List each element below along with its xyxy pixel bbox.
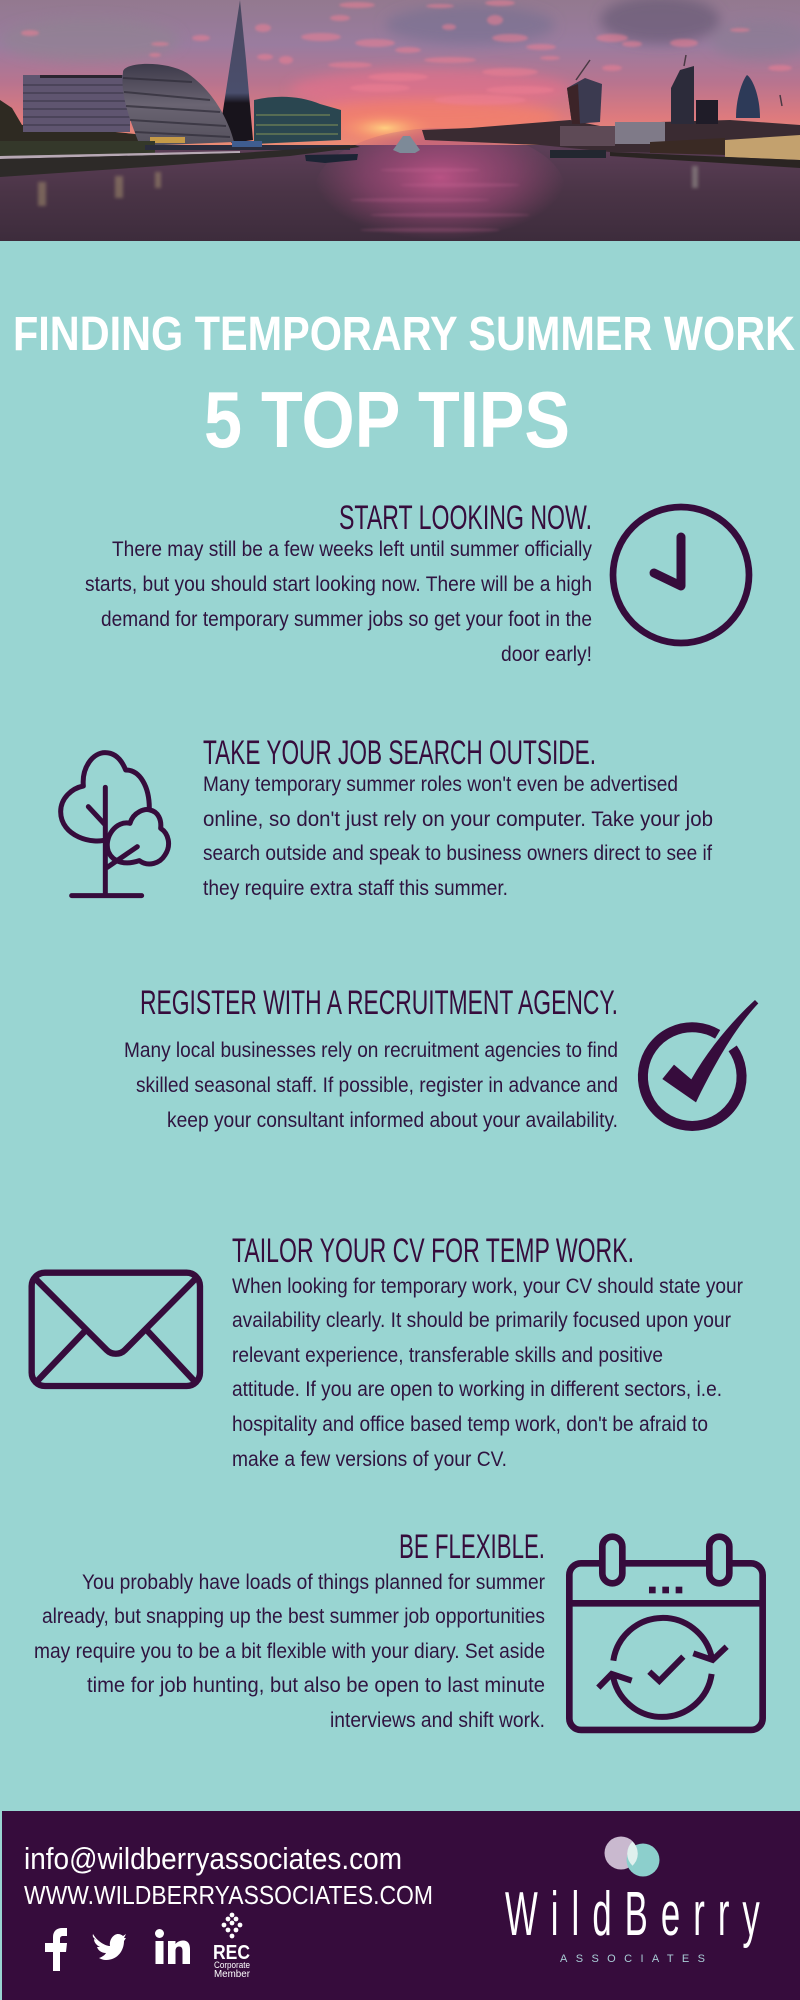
- tip 1 body: starts, but you should start looking now. There will be a high: [85, 572, 592, 596]
- icon: twitter: [93, 1934, 126, 1960]
- left office block: [23, 75, 130, 132]
- tip 4 body: When looking for temporary work, your CV should state your: [232, 1274, 743, 1298]
- tip 5 heading: BE FLEXIBLE.: [399, 1528, 545, 1566]
- tip 5 body: interviews and shift work.: [330, 1708, 545, 1732]
- tip 1: start looking now: [85, 499, 749, 666]
- icon: facebook: [45, 1928, 67, 1971]
- icon: clock: [613, 507, 749, 643]
- City Hall: [122, 64, 234, 146]
- title: [13, 308, 795, 464]
- tip 4 body: hospitality and office based temp work, don't be afraid to: [232, 1412, 708, 1436]
- tip 3 body: keep your consultant informed about your availability.: [167, 1108, 618, 1132]
- embankment wall: [0, 145, 360, 177]
- tip 2 body: search outside and speak to business owners direct to see if: [203, 841, 712, 865]
- glass block: [254, 97, 341, 144]
- tip 4 body: relevant experience, transferable skills and positive: [232, 1343, 663, 1367]
- tip 4: tailor your cv: [32, 1232, 743, 1471]
- tip 5 body: [34, 1570, 545, 1732]
- right skyline: [422, 120, 800, 155]
- header photo: London skyline at sunset: [0, 0, 800, 252]
- icon: linkedin: [155, 1929, 190, 1964]
- REC corporate member logo: Corporate: [214, 1960, 250, 1971]
- tip 5 body: time for job hunting, but also be open to last minute: [87, 1673, 545, 1697]
- email: info@wildberryassociates.com: [24, 1841, 402, 1876]
- tip 2: take your job search outside: [61, 734, 713, 900]
- tip 2 body: [203, 772, 713, 900]
- tip 1 body: door early!: [501, 642, 592, 666]
- tip 5 body: may require you to be a bit flexible with your diary. Set aside: [34, 1639, 545, 1663]
- tip 1 body: There may still be a few weeks left until summer officially: [112, 537, 592, 561]
- icon: tree: [61, 753, 169, 896]
- REC corporate member logo: Member: [214, 1968, 250, 1980]
- tip 3: register with a recruitment agency: [124, 984, 758, 1132]
- The Shard: [220, 0, 253, 143]
- tip 1 body: demand for temporary summer jobs so get your foot in the: [101, 607, 592, 631]
- tip 3 body: [124, 1038, 618, 1132]
- lawn and promenade: [0, 141, 155, 156]
- icon: check mark in circle: [643, 1000, 758, 1126]
- tip 4 body: availability clearly. It should be primarily focused upon your: [232, 1308, 731, 1332]
- tip 3 body: Many local businesses rely on recruitment agencies to find: [124, 1038, 618, 1062]
- website: WWW.WILDBERRYASSOCIATES.COM: [24, 1880, 433, 1910]
- tip 2 body: they require extra staff this summer.: [203, 876, 508, 900]
- tip 4 body: attitude. If you are open to working in different sectors, i.e.: [232, 1377, 722, 1401]
- tip 5 body: already, but snapping up the best summer job opportunities: [42, 1604, 545, 1628]
- footer band: [2, 1811, 800, 2000]
- tip 2 body: online, so don't just rely on your computer. Take your job: [203, 807, 713, 831]
- water: [0, 145, 800, 241]
- tip 1 heading: START LOOKING NOW.: [339, 499, 592, 537]
- tip 5: be flexible: [34, 1528, 763, 1732]
- tip 4 body: [232, 1274, 743, 1471]
- REC corporate member logo: REC: [213, 1942, 250, 1964]
- tip 2 body: Many temporary summer roles won't even be advertised: [203, 772, 678, 796]
- WildBerry Associates logo: ASSOCIATES: [560, 1953, 705, 1965]
- tip 1 body: [85, 537, 592, 666]
- icon: calendar with refresh arrows: [569, 1537, 763, 1730]
- icon: envelope: [32, 1273, 200, 1386]
- title line 2: 5 TOP TIPS: [204, 375, 570, 464]
- tip 2 heading: TAKE YOUR JOB SEARCH OUTSIDE.: [203, 734, 596, 772]
- tip 4 body: make a few versions of your CV.: [232, 1447, 507, 1471]
- left trees: [0, 100, 145, 150]
- WildBerry Associates logo: WildBerry: [505, 1879, 760, 1949]
- tip 5 body: You probably have loads of things planned for summer: [82, 1570, 545, 1594]
- WildBerry Associates logo: [505, 1836, 760, 1965]
- REC corporate member logo: [213, 1913, 250, 1980]
- tip 3 body: skilled seasonal staff. If possible, register in advance and: [136, 1073, 618, 1097]
- reflections: [38, 166, 698, 206]
- boats: [305, 154, 358, 163]
